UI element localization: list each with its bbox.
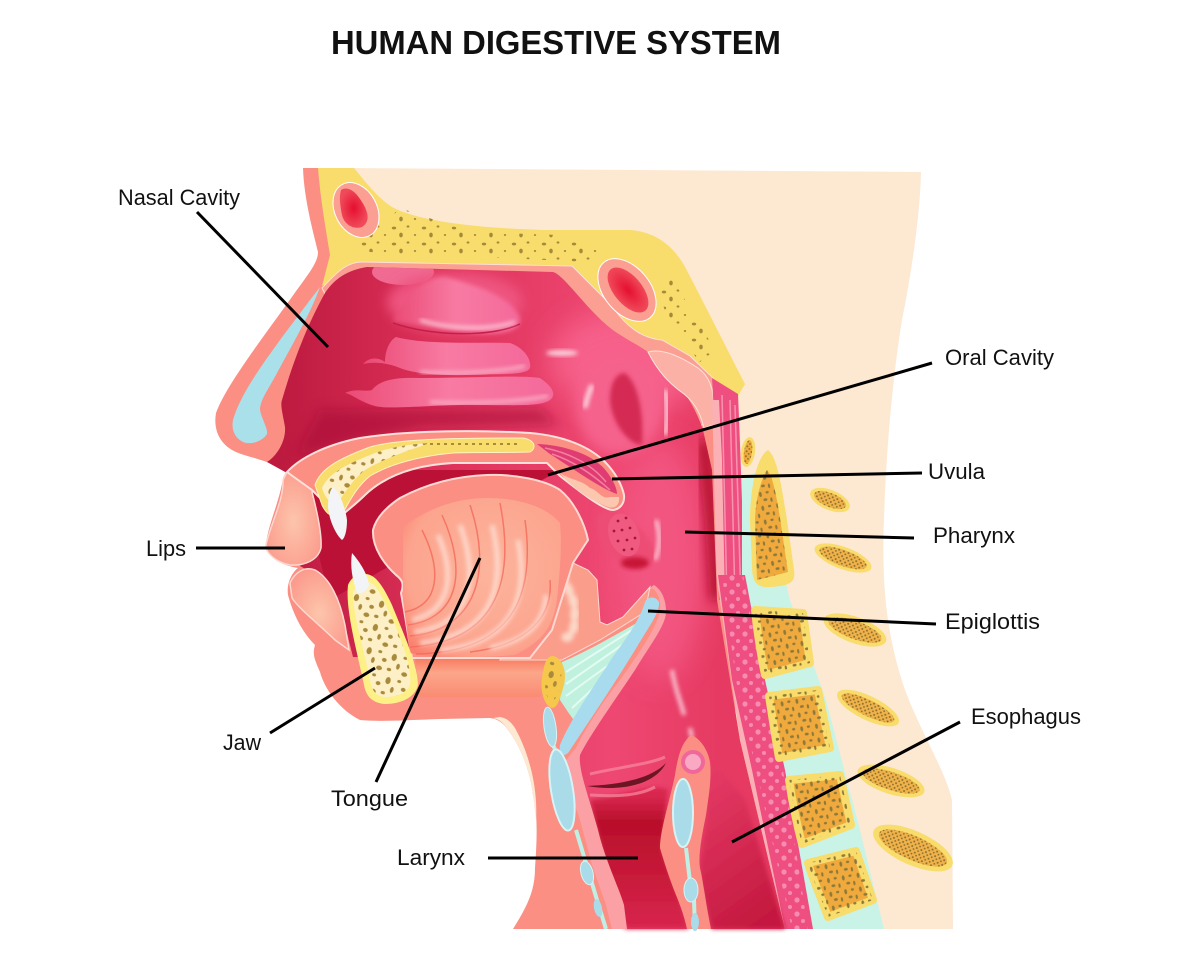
vocal cord slit [587,757,666,796]
esophagus wall: dotted pink strip [718,575,813,929]
nasal turbinates [345,259,553,407]
neck cream sliver [493,717,536,820]
tonsil pocket [597,509,659,569]
label: Nasal Cavity: Nasal Cavity [118,185,240,210]
skull bone texture [352,208,600,262]
label: Uvula: Uvula [928,459,986,484]
label: Lips: Lips [146,536,186,561]
label: Epiglottis: Epiglottis [945,609,1040,634]
spine: disc strip [742,470,884,929]
label: Jaw: Jaw [223,730,261,755]
pale inner edge of strip [712,400,796,929]
nose cartilage [232,287,320,443]
panel: skull bone [318,168,745,396]
larynx interior [590,787,688,929]
uvula tissue [537,444,619,508]
nasal pharynx pale tissue [648,351,714,428]
pharynx shading [296,310,717,680]
epiglottis salmon [566,588,660,760]
label: Nasal Cavity [118,185,328,347]
infographic: head and neck cross-section [120,30,1080,933]
icon: sphenoid sinus [586,248,668,332]
cavity: nasal, oral and pharynx [267,267,785,929]
nasal lining band [322,262,713,425]
front throat wall [566,585,666,929]
laryngeal highlights [672,670,692,738]
label: Jaw [223,668,375,755]
tongue inner with folds [403,498,561,657]
hyoid bone [541,656,565,708]
eustachian tube opening [546,350,667,455]
upper incisor [328,487,347,540]
skull bone texture rear [656,275,715,362]
lower lip [290,569,349,650]
lower incisor [351,553,369,593]
front cartilage rings [541,706,606,929]
label: Oral Cavity [548,345,1054,475]
upper lip [266,468,321,565]
panel: head and neck skin silhouette [215,168,745,929]
tongue glands [562,575,575,638]
upper jaw bone [315,438,534,516]
label: Tongue [331,558,480,811]
tongue outer body [373,475,588,658]
label: Lips [146,536,285,561]
label: Pharynx [685,523,1015,548]
label: Esophagus [732,704,1081,842]
label: Tongue: Tongue [331,786,408,811]
epiglottis cartilage [560,598,659,755]
arytenoid fold [660,735,711,931]
label: Pharynx: Pharynx [933,523,1015,548]
label: Oral Cavity: Oral Cavity [945,345,1054,370]
panel: back of head and neck skin [340,168,953,929]
tongue root and bumpy tissue [500,560,650,660]
spine: spinous processes [739,436,959,881]
label: Uvula [612,459,986,484]
palate [287,431,624,517]
esophagus interior [695,760,785,929]
spine: vertebrae [750,450,873,917]
icon: frontal sinus [324,175,388,245]
green membrane fan [560,620,642,726]
lower jaw bone [348,574,418,704]
label: Esophagus: Esophagus [971,704,1081,729]
label: Epiglottis [648,609,1040,634]
neck muscle strip [712,378,745,600]
title: HUMAN DIGESTIVE SYSTEM [331,24,781,61]
label: Larynx: Larynx [397,845,465,870]
tongue base muscle [415,658,548,697]
